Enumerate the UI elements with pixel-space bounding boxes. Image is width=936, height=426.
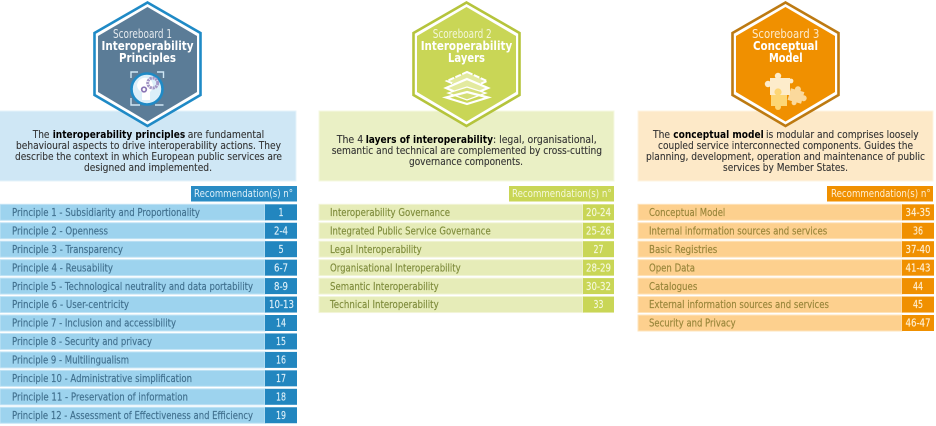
description box 1 [0, 111, 296, 181]
row: open data [638, 260, 934, 276]
row: external information sources and services: 45 [913, 300, 923, 311]
description text 2: semantic and technical are complemented by cross-cutting [332, 144, 602, 157]
row: principle 1: 1 [278, 208, 284, 219]
row: catalogues [638, 278, 934, 294]
row: legal interoperability: 27 [594, 245, 604, 256]
row: principle 6 [0, 297, 297, 313]
row: principle 7 [0, 315, 297, 331]
row: basic registries [638, 241, 934, 257]
row: conceptual model: 34-35 [906, 208, 930, 219]
row: basic registries: Basic Registries [649, 245, 717, 256]
row: organisational interoperability: Organisational Interoperability [330, 263, 461, 274]
description text 2: layers of interoperability [366, 133, 493, 146]
row: principle 12 [0, 407, 297, 423]
description text 3: The [652, 128, 670, 141]
row: open data: 41-43 [906, 263, 930, 274]
description text 1 [15, 128, 282, 174]
description text 1: are fundamental [188, 128, 264, 141]
layers table [319, 204, 614, 313]
row: principle 8 [0, 333, 297, 349]
row: integrated public service governance: Integrated Public Service Governance [330, 226, 491, 237]
row: principle 1: Principle 1 - Subsidiarity and Proportionality [12, 208, 200, 219]
row: principle 8: Principle 8 - Security and privacy [12, 337, 152, 348]
row: principle 6: Principle 6 - User-centricity [12, 300, 129, 311]
hexagon badge 1: Scoreboard 1 [113, 26, 172, 41]
row: security and privacy [638, 315, 934, 331]
panel: scoreboard 3 conceptual model [638, 2, 934, 331]
row: interoperability governance [319, 204, 614, 220]
description text 3: services by Member States. [723, 161, 848, 174]
row: principle 10: 17 [276, 374, 286, 385]
row: principle 6: 10-13 [269, 300, 294, 311]
row: external information sources and services: External information sources and services [649, 300, 829, 311]
hexagon badge 1: Principles [119, 50, 176, 65]
panel: scoreboard 2 interoperability layers [319, 2, 614, 313]
description text 1: The [32, 128, 50, 141]
row: security and privacy: Security and Privacy [649, 319, 736, 330]
row: technical interoperability [319, 297, 614, 313]
row: internal information sources and services [638, 223, 934, 239]
description text 3 [646, 128, 925, 174]
principles table [0, 204, 297, 423]
row: legal interoperability [319, 241, 614, 257]
recommendation header 2: Recommendation(s) n° [512, 189, 612, 200]
row: principle 8: 15 [276, 337, 286, 348]
row: internal information sources and services: Internal information sources and services [649, 226, 827, 237]
row: principle 3: 5 [278, 245, 284, 256]
row: principle 11: Principle 11 - Preservation of information [12, 392, 188, 404]
row: principle 9: Principle 9 - Multilingualism [12, 356, 129, 367]
description text 2: governance components. [409, 155, 523, 168]
row: conceptual model [638, 204, 934, 220]
row: semantic interoperability [319, 278, 614, 294]
row: principle 2: Principle 2 - Openness [12, 226, 108, 237]
row: legal interoperability: Legal Interoperability [330, 245, 422, 256]
row: principle 4: 6-7 [274, 263, 288, 274]
row: principle 11: 18 [276, 392, 286, 404]
row: organisational interoperability: 28-29 [586, 263, 611, 274]
row: principle 5: 8-9 [274, 282, 288, 293]
recommendation header 1 [191, 186, 297, 202]
description box 2 [319, 111, 614, 181]
description text 1: describe the context in which European public services are [15, 150, 282, 163]
row: principle 4: Principle 4 - Reusability [12, 263, 113, 274]
description text 2: : legal, organisational, [493, 133, 597, 146]
row: principle 4 [0, 260, 297, 276]
row: semantic interoperability: 30-32 [586, 282, 611, 293]
description text 3: conceptual model [673, 128, 764, 141]
hexagon badge 2: Interoperability [421, 38, 512, 53]
row: external information sources and services [638, 297, 934, 313]
row: principle 9 [0, 352, 297, 368]
description text 1: interoperability principles [53, 128, 186, 141]
row: interoperability governance: 20-24 [586, 208, 611, 219]
row: principle 5 [0, 278, 297, 294]
description text 1: behavioural aspects to drive interoperability actions. They [16, 139, 281, 152]
row: principle 3 [0, 241, 297, 257]
description text 2 [332, 133, 602, 168]
row: basic registries: 37-40 [906, 245, 930, 256]
row: conceptual model: Conceptual Model [649, 208, 725, 219]
row: integrated public service governance [319, 223, 614, 239]
row: catalogues: 44 [913, 282, 923, 293]
row: principle 1 [0, 204, 297, 220]
row: principle 11 [0, 389, 297, 405]
row: principle 2: 2-4 [274, 226, 288, 237]
recommendation header 1: Recommendation(s) n° [194, 189, 293, 200]
row: interoperability governance: Interoperability Governance [330, 208, 450, 219]
row: internal information sources and services: 36 [913, 226, 923, 237]
recommendation header 3 [827, 186, 933, 202]
description text 1: designed and implemented. [84, 161, 212, 174]
hexagon badge 2 [414, 2, 520, 126]
panel: scoreboard 1 interoperability principles [0, 2, 297, 423]
conceptual model table [638, 204, 934, 331]
icon: stacked layers [446, 72, 488, 104]
recommendation header 2 [509, 186, 614, 202]
row: principle 9: 16 [276, 356, 286, 367]
row: integrated public service governance: 25-26 [586, 226, 611, 237]
hexagon badge 3 [732, 2, 838, 126]
hexagon badge 1: Interoperability [102, 38, 194, 53]
hexagon badge 3: Scoreboard 3 [752, 26, 819, 41]
row: principle 10 [0, 370, 297, 386]
row: technical interoperability: Technical Interoperability [329, 300, 439, 311]
description text 2: The 4 [336, 133, 363, 146]
row: principle 7: Principle 7 - Inclusion and accessibility [12, 319, 176, 330]
icon: light bulb with gears [131, 72, 164, 105]
row: principle 7: 14 [276, 319, 286, 330]
hexagon badge 3: Conceptual [753, 38, 818, 53]
hexagon badge 1 [94, 2, 200, 126]
icon: puzzle pieces [765, 73, 809, 110]
row: principle 12: Principle 12 - Assessment of Effectiveness and Efficiency [12, 411, 253, 422]
hexagon badge 2: Scoreboard 2 [433, 26, 492, 41]
row: technical interoperability: 33 [594, 300, 604, 311]
hexagon badge 2: Layers [448, 50, 485, 65]
row: principle 10: Principle 10 - Administrative simplification [12, 374, 192, 385]
row: principle 12: 19 [276, 411, 286, 422]
row: catalogues: Catalogues [649, 282, 697, 293]
row: principle 2 [0, 223, 297, 239]
hexagon badge 3: Model [769, 50, 803, 65]
row: semantic interoperability: Semantic Interoperability [330, 282, 439, 293]
row: organisational interoperability [319, 260, 614, 276]
row: principle 3: Principle 3 - Transparency [12, 245, 123, 256]
row: open data: Open Data [649, 263, 695, 274]
row: principle 5: Principle 5 - Technological neutrality and data portability [12, 282, 253, 293]
description box 3 [638, 111, 933, 181]
row: security and privacy: 46-47 [906, 319, 930, 330]
